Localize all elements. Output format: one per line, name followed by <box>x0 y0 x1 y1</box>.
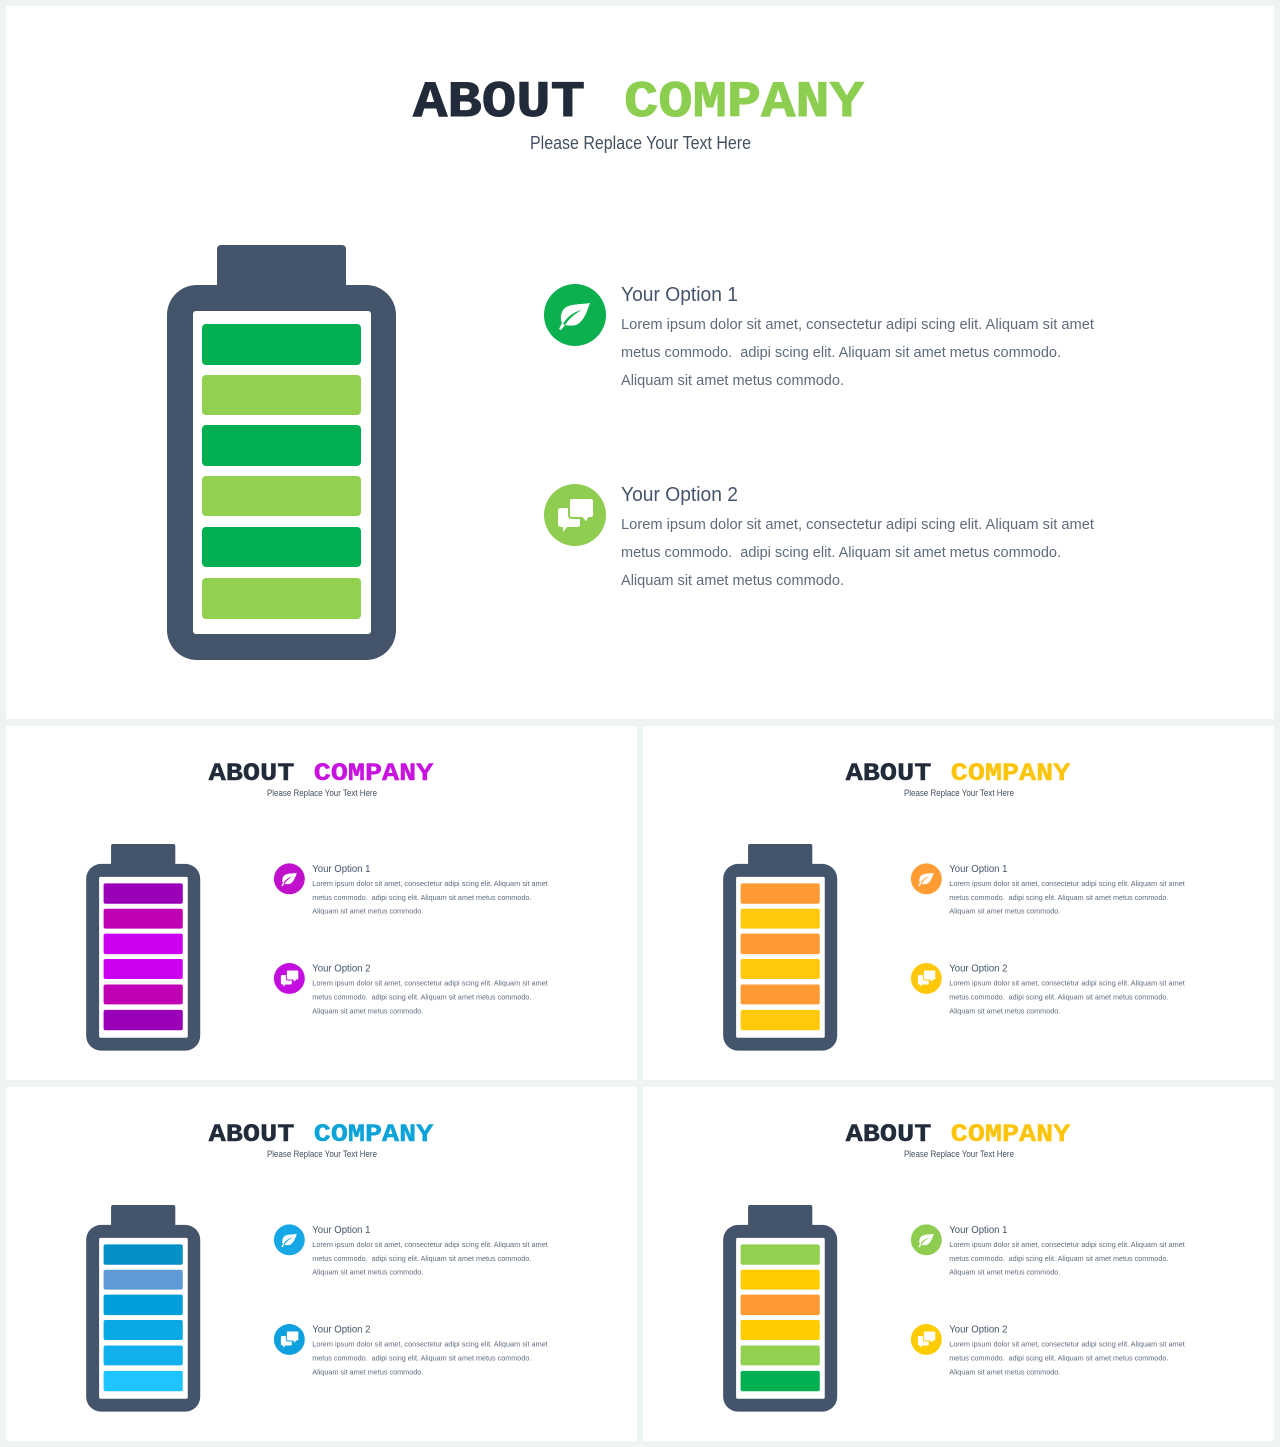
panel: orange slide <box>723 759 1186 1051</box>
text block: option 1: Your Option 1 <box>621 284 738 306</box>
text block: option 1: Aliquam sit amet metus commodo. <box>621 372 844 389</box>
text block: option 1 <box>621 284 1095 389</box>
title <box>846 1120 1071 1149</box>
text block: option 2: Your Option 2 <box>312 1324 371 1335</box>
subtitle: Please Replace Your Text Here <box>904 1149 1014 1159</box>
subtitle: Please Replace Your Text Here <box>530 133 751 153</box>
text block: option 1: Your Option 1 <box>312 864 371 875</box>
text block: option 1: Aliquam sit amet metus commodo. <box>312 907 423 916</box>
text block: option 1: metus commodo. adipi scing elit. Aliquam sit amet metus commodo. <box>949 1254 1168 1263</box>
text block: option 1: Lorem ipsum dolor sit amet, consectetur adipi scing elit. Aliquam sit amet <box>312 1240 549 1249</box>
title: ABOUT <box>413 75 585 132</box>
title <box>209 759 434 788</box>
panel: purple slide <box>86 759 549 1051</box>
panel: green main slide <box>167 75 1095 660</box>
subtitle: Please Replace Your Text Here <box>267 788 377 798</box>
title: ABOUT <box>209 759 294 788</box>
text block: option 2: Lorem ipsum dolor sit amet, consectetur adipi scing elit. Aliquam sit amet <box>312 1339 549 1348</box>
icon: speech bubbles <box>544 484 606 546</box>
text block: option 2: Aliquam sit amet metus commodo. <box>949 1006 1060 1015</box>
title: COMPANY <box>951 759 1071 788</box>
icon: leaf <box>274 1224 305 1255</box>
text block: option 2: Lorem ipsum dolor sit amet, consectetur adipi scing elit. Aliquam sit amet <box>312 978 549 987</box>
text block: option 2: Lorem ipsum dolor sit amet, consectetur adipi scing elit. Aliquam sit amet <box>949 1339 1186 1348</box>
text block: option 1: Lorem ipsum dolor sit amet, consectetur adipi scing elit. Aliquam sit amet <box>949 879 1186 888</box>
text block: option 2: Your Option 2 <box>949 1324 1008 1335</box>
text block: option 2: Aliquam sit amet metus commodo. <box>621 572 844 589</box>
icon: leaf <box>911 1224 942 1255</box>
text block: option 1: Aliquam sit amet metus commodo. <box>312 1268 423 1277</box>
text block: option 1: metus commodo. adipi scing elit. Aliquam sit amet metus commodo. <box>312 1254 531 1263</box>
text block: option 2 <box>312 963 549 1015</box>
icon: leaf <box>544 284 606 346</box>
text block: option 2 <box>621 484 1095 589</box>
text block: option 1: Your Option 1 <box>312 1225 371 1236</box>
text block: option 1 <box>949 864 1186 916</box>
title: ABOUT <box>209 1120 294 1149</box>
icon: speech bubbles <box>274 1324 305 1355</box>
text block: option 2: Your Option 2 <box>312 963 371 974</box>
icon: leaf <box>274 863 305 894</box>
text block: option 2: metus commodo. adipi scing elit. Aliquam sit amet metus commodo. <box>312 992 531 1001</box>
battery chart <box>723 844 837 1051</box>
text block: option 2 <box>949 1324 1186 1376</box>
text block: option 2: metus commodo. adipi scing elit. Aliquam sit amet metus commodo. <box>621 544 1061 561</box>
text block: option 1 <box>312 864 549 916</box>
text block: option 2: metus commodo. adipi scing elit. Aliquam sit amet metus commodo. <box>949 992 1168 1001</box>
text block: option 1: metus commodo. adipi scing elit. Aliquam sit amet metus commodo. <box>621 344 1061 361</box>
title: COMPANY <box>314 759 434 788</box>
panel: blue slide <box>86 1120 549 1412</box>
title <box>846 759 1071 788</box>
text block: option 1: Lorem ipsum dolor sit amet, consectetur adipi scing elit. Aliquam sit amet <box>621 316 1095 333</box>
text block: option 1: metus commodo. adipi scing elit. Aliquam sit amet metus commodo. <box>312 893 531 902</box>
title: COMPANY <box>314 1120 434 1149</box>
text block: option 2: Lorem ipsum dolor sit amet, consectetur adipi scing elit. Aliquam sit amet <box>949 978 1186 987</box>
text block: option 2: Your Option 2 <box>949 963 1008 974</box>
icon: leaf <box>911 863 942 894</box>
text block: option 2 <box>949 963 1186 1015</box>
battery chart <box>86 844 200 1051</box>
text block: option 2 <box>312 1324 549 1376</box>
title <box>209 1120 434 1149</box>
battery chart <box>86 1205 200 1412</box>
title: ABOUT <box>846 759 931 788</box>
text block: option 1: metus commodo. adipi scing elit. Aliquam sit amet metus commodo. <box>949 893 1168 902</box>
title: COMPANY <box>951 1120 1071 1149</box>
text block: option 1: Aliquam sit amet metus commodo. <box>949 1268 1060 1277</box>
text block: option 1: Your Option 1 <box>949 864 1008 875</box>
panel: multicolour slide <box>723 1120 1186 1412</box>
text block: option 1: Lorem ipsum dolor sit amet, consectetur adipi scing elit. Aliquam sit amet <box>949 1240 1186 1249</box>
subtitle: Please Replace Your Text Here <box>904 788 1014 798</box>
text block: option 2: metus commodo. adipi scing elit. Aliquam sit amet metus commodo. <box>312 1353 531 1362</box>
text block: option 2: Aliquam sit amet metus commodo. <box>312 1006 423 1015</box>
text block: option 2: metus commodo. adipi scing elit. Aliquam sit amet metus commodo. <box>949 1353 1168 1362</box>
battery chart <box>167 245 396 660</box>
text block: option 2: Lorem ipsum dolor sit amet, consectetur adipi scing elit. Aliquam sit amet <box>621 516 1095 533</box>
title <box>413 75 864 132</box>
icon: speech bubbles <box>911 1324 942 1355</box>
icon: speech bubbles <box>911 963 942 994</box>
text block: option 1: Aliquam sit amet metus commodo. <box>949 907 1060 916</box>
text block: option 2: Your Option 2 <box>621 484 738 506</box>
title: COMPANY <box>624 75 864 132</box>
text block: option 1 <box>312 1225 549 1277</box>
text block: option 2: Aliquam sit amet metus commodo. <box>949 1367 1060 1376</box>
subtitle: Please Replace Your Text Here <box>267 1149 377 1159</box>
battery chart <box>723 1205 837 1412</box>
text block: option 2: Aliquam sit amet metus commodo. <box>312 1367 423 1376</box>
icon: speech bubbles <box>274 963 305 994</box>
text block: option 1: Lorem ipsum dolor sit amet, consectetur adipi scing elit. Aliquam sit amet <box>312 879 549 888</box>
text block: option 1: Your Option 1 <box>949 1225 1008 1236</box>
title: ABOUT <box>846 1120 931 1149</box>
text block: option 1 <box>949 1225 1186 1277</box>
